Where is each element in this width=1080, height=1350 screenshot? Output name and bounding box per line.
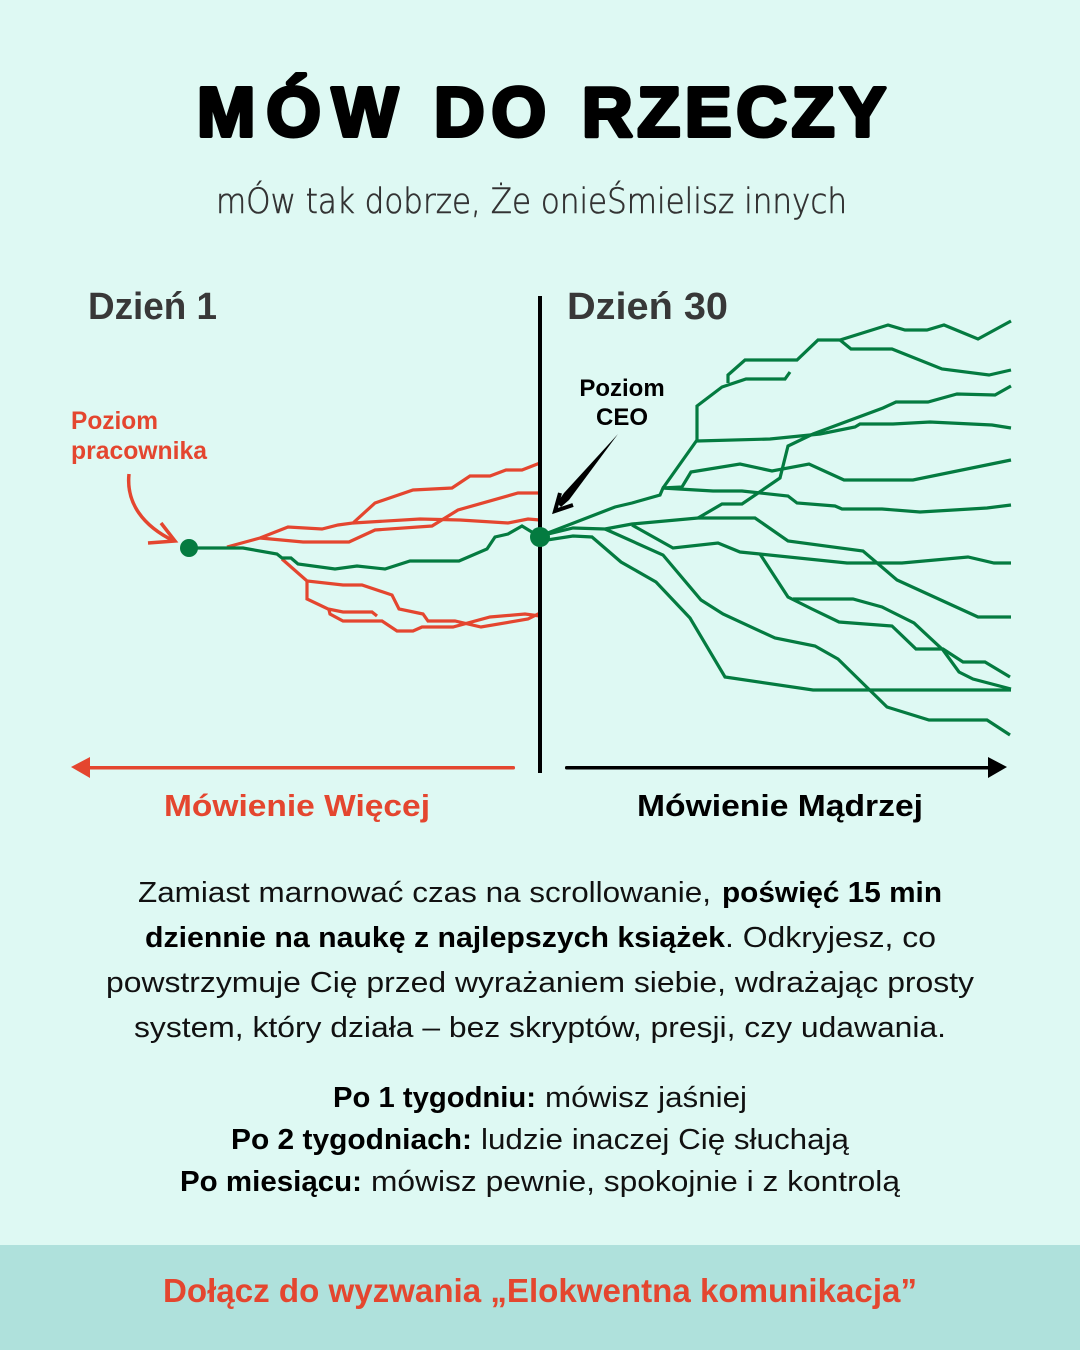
- chart: green paths downward day 30: [540, 518, 1011, 735]
- label: Poziom CEO: Poziom: [579, 375, 665, 402]
- text block: timeline: Po miesiącu:: [180, 1166, 362, 1198]
- label: Poziom CEO: [579, 375, 665, 431]
- axis: vertical divider: [538, 296, 542, 773]
- chart: green paths upward day 30: [540, 321, 1011, 536]
- text block: description: . Odkryjesz, co: [725, 922, 936, 954]
- label: Poziom CEO: CEO: [596, 404, 648, 431]
- chart: green path day 1: [189, 526, 540, 569]
- text block: description: Zamiast marnować czas na scrollowanie,: [138, 877, 711, 909]
- icon: center dot: [530, 527, 550, 547]
- title: MÓW: [197, 73, 398, 151]
- text block: timeline: Po 1 tygodniu:: [333, 1082, 536, 1114]
- footer banner: [0, 1245, 1080, 1350]
- chart: red paths day 1: [227, 463, 540, 631]
- text block: timeline: mówisz pewnie, spokojnie i z kontrolą: [371, 1166, 901, 1198]
- text block: timeline: mówisz jaśniej: [545, 1082, 747, 1114]
- label: Mówienie Mądrzej: Mówienie Mądrzej: [637, 788, 923, 823]
- title: DO: [434, 73, 546, 151]
- icon: start dot: [180, 539, 198, 557]
- arrow: black right: [565, 757, 1007, 778]
- text block: description: dziennie na naukę z najlepszych książek: [145, 922, 726, 954]
- title: RZECZY: [582, 73, 886, 151]
- label: Mówienie Więcej: Mówienie Więcej: [164, 788, 430, 823]
- title: [197, 73, 886, 151]
- text block: description: poświęć 15 min: [722, 877, 942, 909]
- text block: timeline: Po 2 tygodniach:: [231, 1124, 472, 1156]
- label: Poziom pracownika: pracownika: [71, 437, 208, 465]
- text block: timeline: [180, 1082, 901, 1198]
- heading: Dzień 1: Dzień 1: [88, 286, 217, 328]
- icon: curved red arrow: [129, 474, 175, 543]
- text block: description: system, który działa – bez skryptów, presji, czy udawania.: [134, 1012, 946, 1044]
- text block: timeline: ludzie inaczej Cię słuchają: [481, 1124, 850, 1156]
- label: Poziom pracownika: Poziom: [71, 407, 158, 435]
- heading: Dzień 30: Dzień 30: [567, 286, 728, 328]
- text block: description: [106, 877, 975, 1044]
- icon: black arrow to CEO level: [555, 434, 618, 511]
- footer banner: Dołącz do wyzwania „Elokwentna komunikacja”: [163, 1272, 917, 1309]
- subtitle: mÓw tak dobrze, Że onieŚmielisz innych: [216, 180, 847, 222]
- text block: description: powstrzymuje Cię przed wyrażaniem siebie, wdrażając prosty: [106, 967, 975, 999]
- label: Poziom pracownika: [71, 407, 208, 465]
- arrow: red left: [71, 757, 515, 778]
